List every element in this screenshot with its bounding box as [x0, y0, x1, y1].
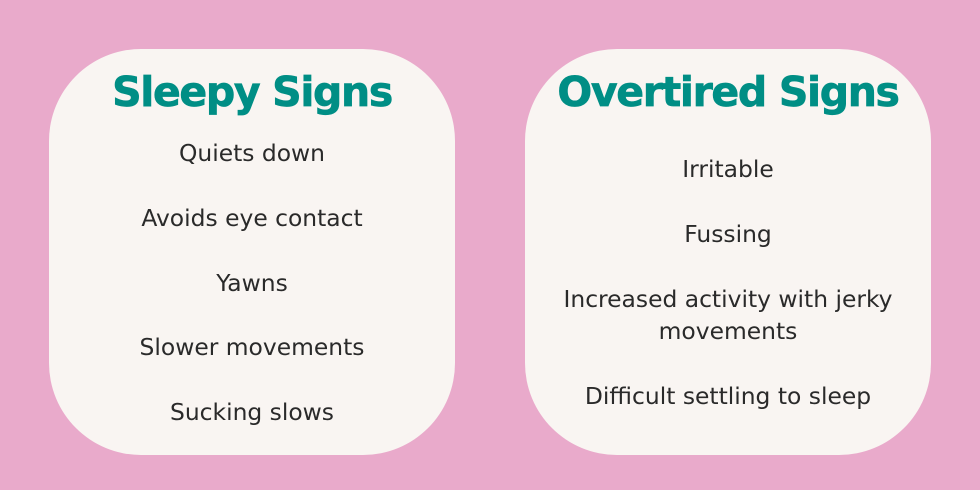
text: Slower movements: Slower movements — [140, 333, 364, 361]
text: Yawns: Yawns — [216, 269, 288, 297]
text: Increased activity with jerky movements: movements — [659, 317, 797, 345]
panel: sleepy signs — [49, 49, 455, 455]
text: Quiets down: Quiets down — [179, 139, 325, 167]
heading: Sleepy Signs: Sleepy Signs — [112, 68, 392, 116]
panel: overtired signs — [525, 49, 931, 455]
text: Difficult settling to sleep: Difficult settling to sleep — [585, 382, 871, 410]
text: Irritable: Irritable — [682, 155, 774, 183]
text: Increased activity with jerky movements — [563, 285, 893, 345]
text: Increased activity with jerky movements: Increased activity with jerky — [563, 285, 893, 313]
heading: Overtired Signs: Overtired Signs — [557, 68, 899, 116]
text: Fussing: Fussing — [684, 220, 772, 248]
text: Avoids eye contact: Avoids eye contact — [141, 204, 363, 232]
text: Sucking slows: Sucking slows — [170, 398, 334, 426]
